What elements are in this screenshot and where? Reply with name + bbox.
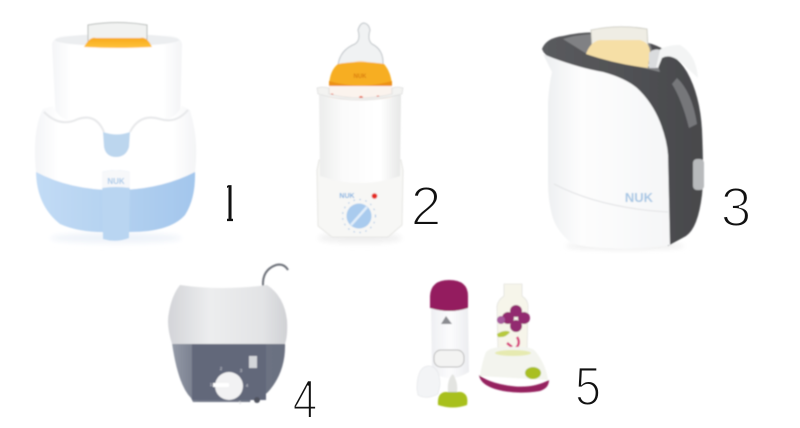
cup body <box>319 95 401 183</box>
label window <box>434 350 464 367</box>
dial numbers: 4 <box>246 383 249 388</box>
label <box>249 356 257 368</box>
dial pointer <box>213 383 229 387</box>
glass jar <box>88 22 147 42</box>
centre panel <box>192 343 266 400</box>
cup rim <box>317 87 403 100</box>
shadow <box>50 233 182 243</box>
lower blue base <box>36 170 195 232</box>
white body <box>543 54 670 249</box>
dark shell <box>542 32 703 246</box>
bottle in cup <box>329 86 392 100</box>
base <box>317 160 403 237</box>
number 3: 3 <box>721 176 751 238</box>
dial numbers: 2 <box>220 366 223 371</box>
teat <box>448 374 457 392</box>
inner well <box>563 34 660 72</box>
number 1: 1 <box>214 172 244 234</box>
NUK base label: NUK <box>339 193 355 200</box>
upper shell <box>168 285 287 344</box>
tall container <box>431 305 469 378</box>
power cord <box>263 265 288 286</box>
lower dark base <box>172 343 285 402</box>
clear dome <box>417 366 440 397</box>
shadow <box>565 243 685 249</box>
dial ring <box>215 372 243 400</box>
dial numbers: 3 <box>240 368 243 373</box>
shadow <box>318 233 402 243</box>
triangle mark <box>441 316 452 324</box>
blue level window <box>103 132 130 157</box>
dial numbers: 5 <box>239 400 242 405</box>
red indicator <box>372 193 377 199</box>
purple cap <box>430 280 468 311</box>
number 2: 2 <box>411 175 441 237</box>
warmer base <box>480 347 548 380</box>
green button <box>525 367 541 379</box>
cup opening <box>55 34 179 46</box>
NUK label: NUK <box>107 177 125 186</box>
glass jar <box>591 27 648 48</box>
bottle <box>497 284 528 352</box>
upper cup <box>52 35 182 122</box>
dial <box>346 204 372 228</box>
product 1: NUK warmer with blue base <box>35 22 196 243</box>
dial numbers: 1 <box>210 382 213 387</box>
NUK label: NUK <box>625 190 654 205</box>
orange liquid <box>84 38 152 48</box>
product 5: purple and green warmer set <box>417 280 549 408</box>
NUK collar label: NUK <box>354 74 367 80</box>
teat <box>338 23 383 65</box>
cream liquid <box>586 40 650 68</box>
number 5: 5 <box>575 355 601 417</box>
clasp <box>102 170 130 241</box>
product 2: NUK warmer with dial <box>317 23 403 243</box>
switch <box>693 159 704 190</box>
product 3: NUK warmer dark grey and white <box>542 27 704 249</box>
clear tab <box>648 45 698 78</box>
dial numbers <box>210 366 249 405</box>
lower white housing <box>35 106 196 190</box>
green collar <box>438 392 467 408</box>
grip recess <box>672 78 697 128</box>
product 4: grey warmer with dial <box>168 265 288 405</box>
orange collar <box>329 62 392 90</box>
flower decor <box>497 305 530 332</box>
lamp <box>254 397 260 403</box>
